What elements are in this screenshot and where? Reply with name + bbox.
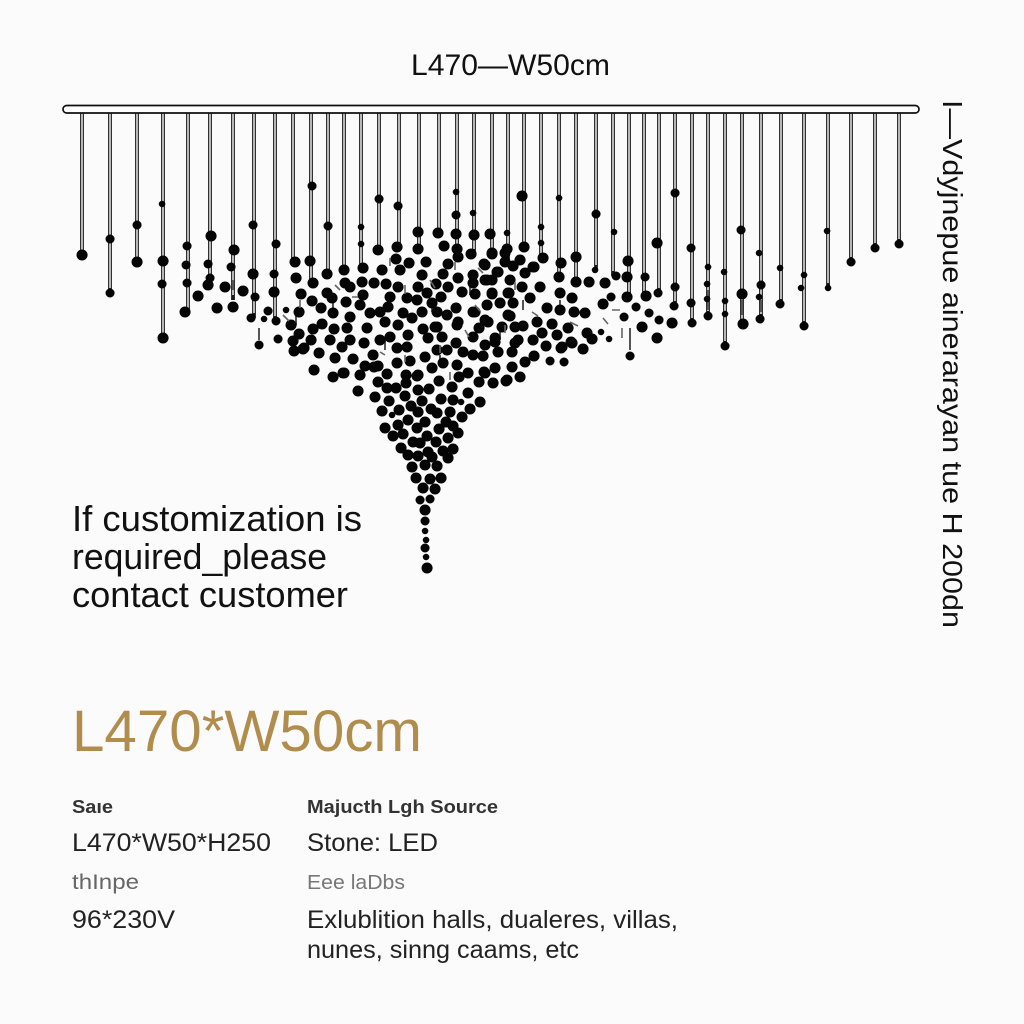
customization note: contact customer [72,574,348,615]
spec: light source [307,797,498,857]
spec: applicable spaces: Eee laDbs [307,872,405,894]
spec: size [72,797,271,857]
crystal balls: medium [110,186,899,548]
top dimension label: L470—W50cm [411,49,610,82]
spec: applicable spaces: Exlublition halls, dualeres, villas, [307,906,678,934]
spec: size: L470*W50*H250 [72,829,271,857]
spec: voltage [72,871,175,934]
chandelier diagram [63,106,919,568]
spec: applicable spaces [307,872,678,964]
customization note [72,498,362,615]
crystal balls: large [82,196,743,568]
customization note: required_please [72,536,327,577]
spec: size: Saıe [72,797,113,817]
spec: voltage: thInpe [72,871,139,894]
hanging rods [82,113,899,365]
top bar [63,106,919,113]
gold size heading: L470*W50cm [72,699,422,764]
grey crystal smudges [283,258,622,380]
vertical side label: I—Vdyjnepue ainerarayan tue H 200dn [937,100,968,628]
spec: light source: Majucth Lgh Source [307,797,498,817]
customization note: If customization is [72,498,362,539]
spec: light source: Stone: LED [307,829,438,857]
spec: voltage: 96*230V [72,906,175,934]
crystal balls: small [162,192,828,557]
spec: applicable spaces: nunes, sinng caams, etc [307,936,579,964]
